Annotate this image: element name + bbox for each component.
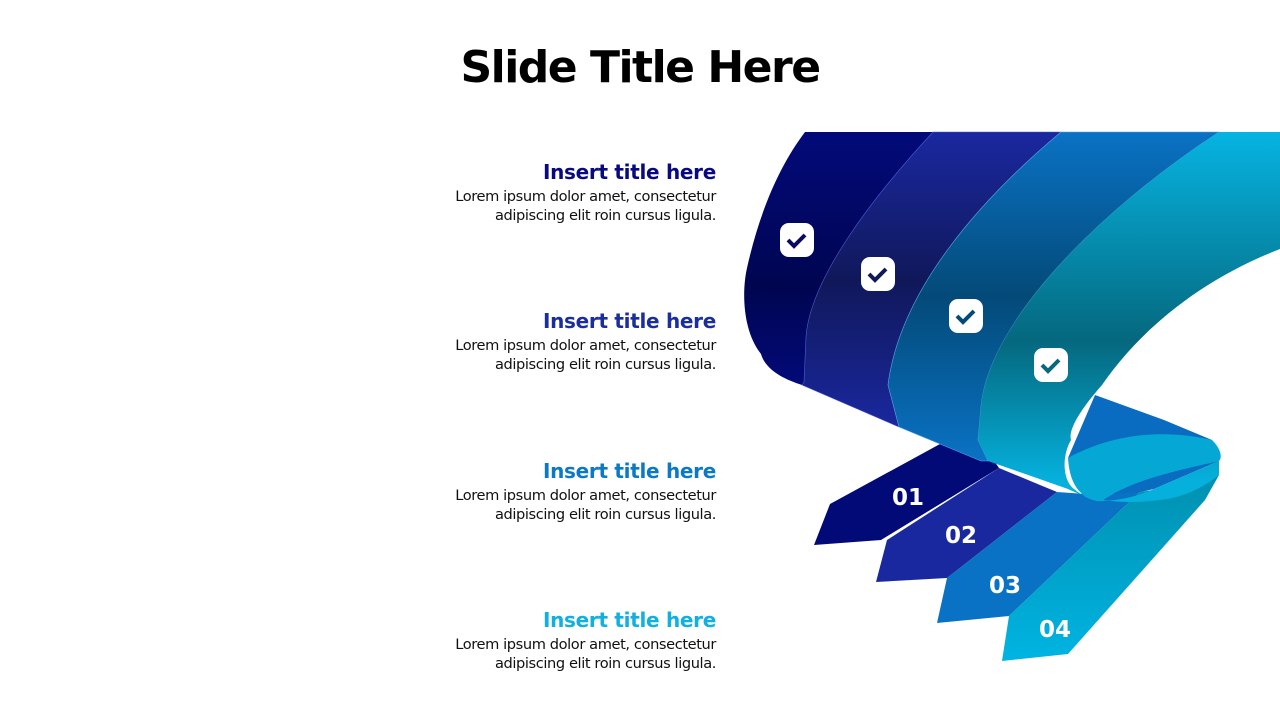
text block 3: Lorem ipsum dolor amet, consectetur <box>455 487 716 504</box>
text block 1: Lorem ipsum dolor amet, consectetur <box>455 188 716 205</box>
text block 2: Lorem ipsum dolor amet, consectetur <box>455 337 716 354</box>
arrow 02 <box>876 468 1057 582</box>
arrow 04: 04 <box>1039 617 1071 643</box>
text block 4: adipiscing elit roin cursus ligula. <box>495 655 716 672</box>
text block 3: adipiscing elit roin cursus ligula. <box>495 506 716 523</box>
text block 4 <box>455 608 716 672</box>
checkbox icon 4 <box>1034 348 1068 382</box>
arrow 03: 03 <box>989 573 1021 599</box>
text block 3 <box>455 459 716 523</box>
checkbox icon 3 <box>949 299 983 333</box>
arrow 01: 01 <box>892 485 924 511</box>
title: Slide Title Here <box>460 42 820 93</box>
arrow 01 <box>814 444 999 545</box>
band 4 with loop <box>978 132 1280 502</box>
arrow 04 <box>1002 475 1219 661</box>
text block 1: Insert title here <box>543 160 716 184</box>
band 2 <box>802 132 1061 427</box>
checkbox icon 1 <box>780 223 814 257</box>
text block 1: adipiscing elit roin cursus ligula. <box>495 207 716 224</box>
back strip of ribbon <box>1068 395 1219 501</box>
band 1 <box>744 132 933 385</box>
band 3 <box>888 132 1219 461</box>
arrow 02: 02 <box>945 523 977 549</box>
text block 2: Insert title here <box>543 309 716 333</box>
arrow 03 <box>937 492 1140 623</box>
text block 4: Lorem ipsum dolor amet, consectetur <box>455 636 716 653</box>
text block 2 <box>455 309 716 373</box>
text block 4: Insert title here <box>543 608 716 632</box>
text block 1 <box>455 160 716 224</box>
text block 3: Insert title here <box>543 459 716 483</box>
text block 2: adipiscing elit roin cursus ligula. <box>495 356 716 373</box>
checkbox icon 2 <box>861 257 895 291</box>
